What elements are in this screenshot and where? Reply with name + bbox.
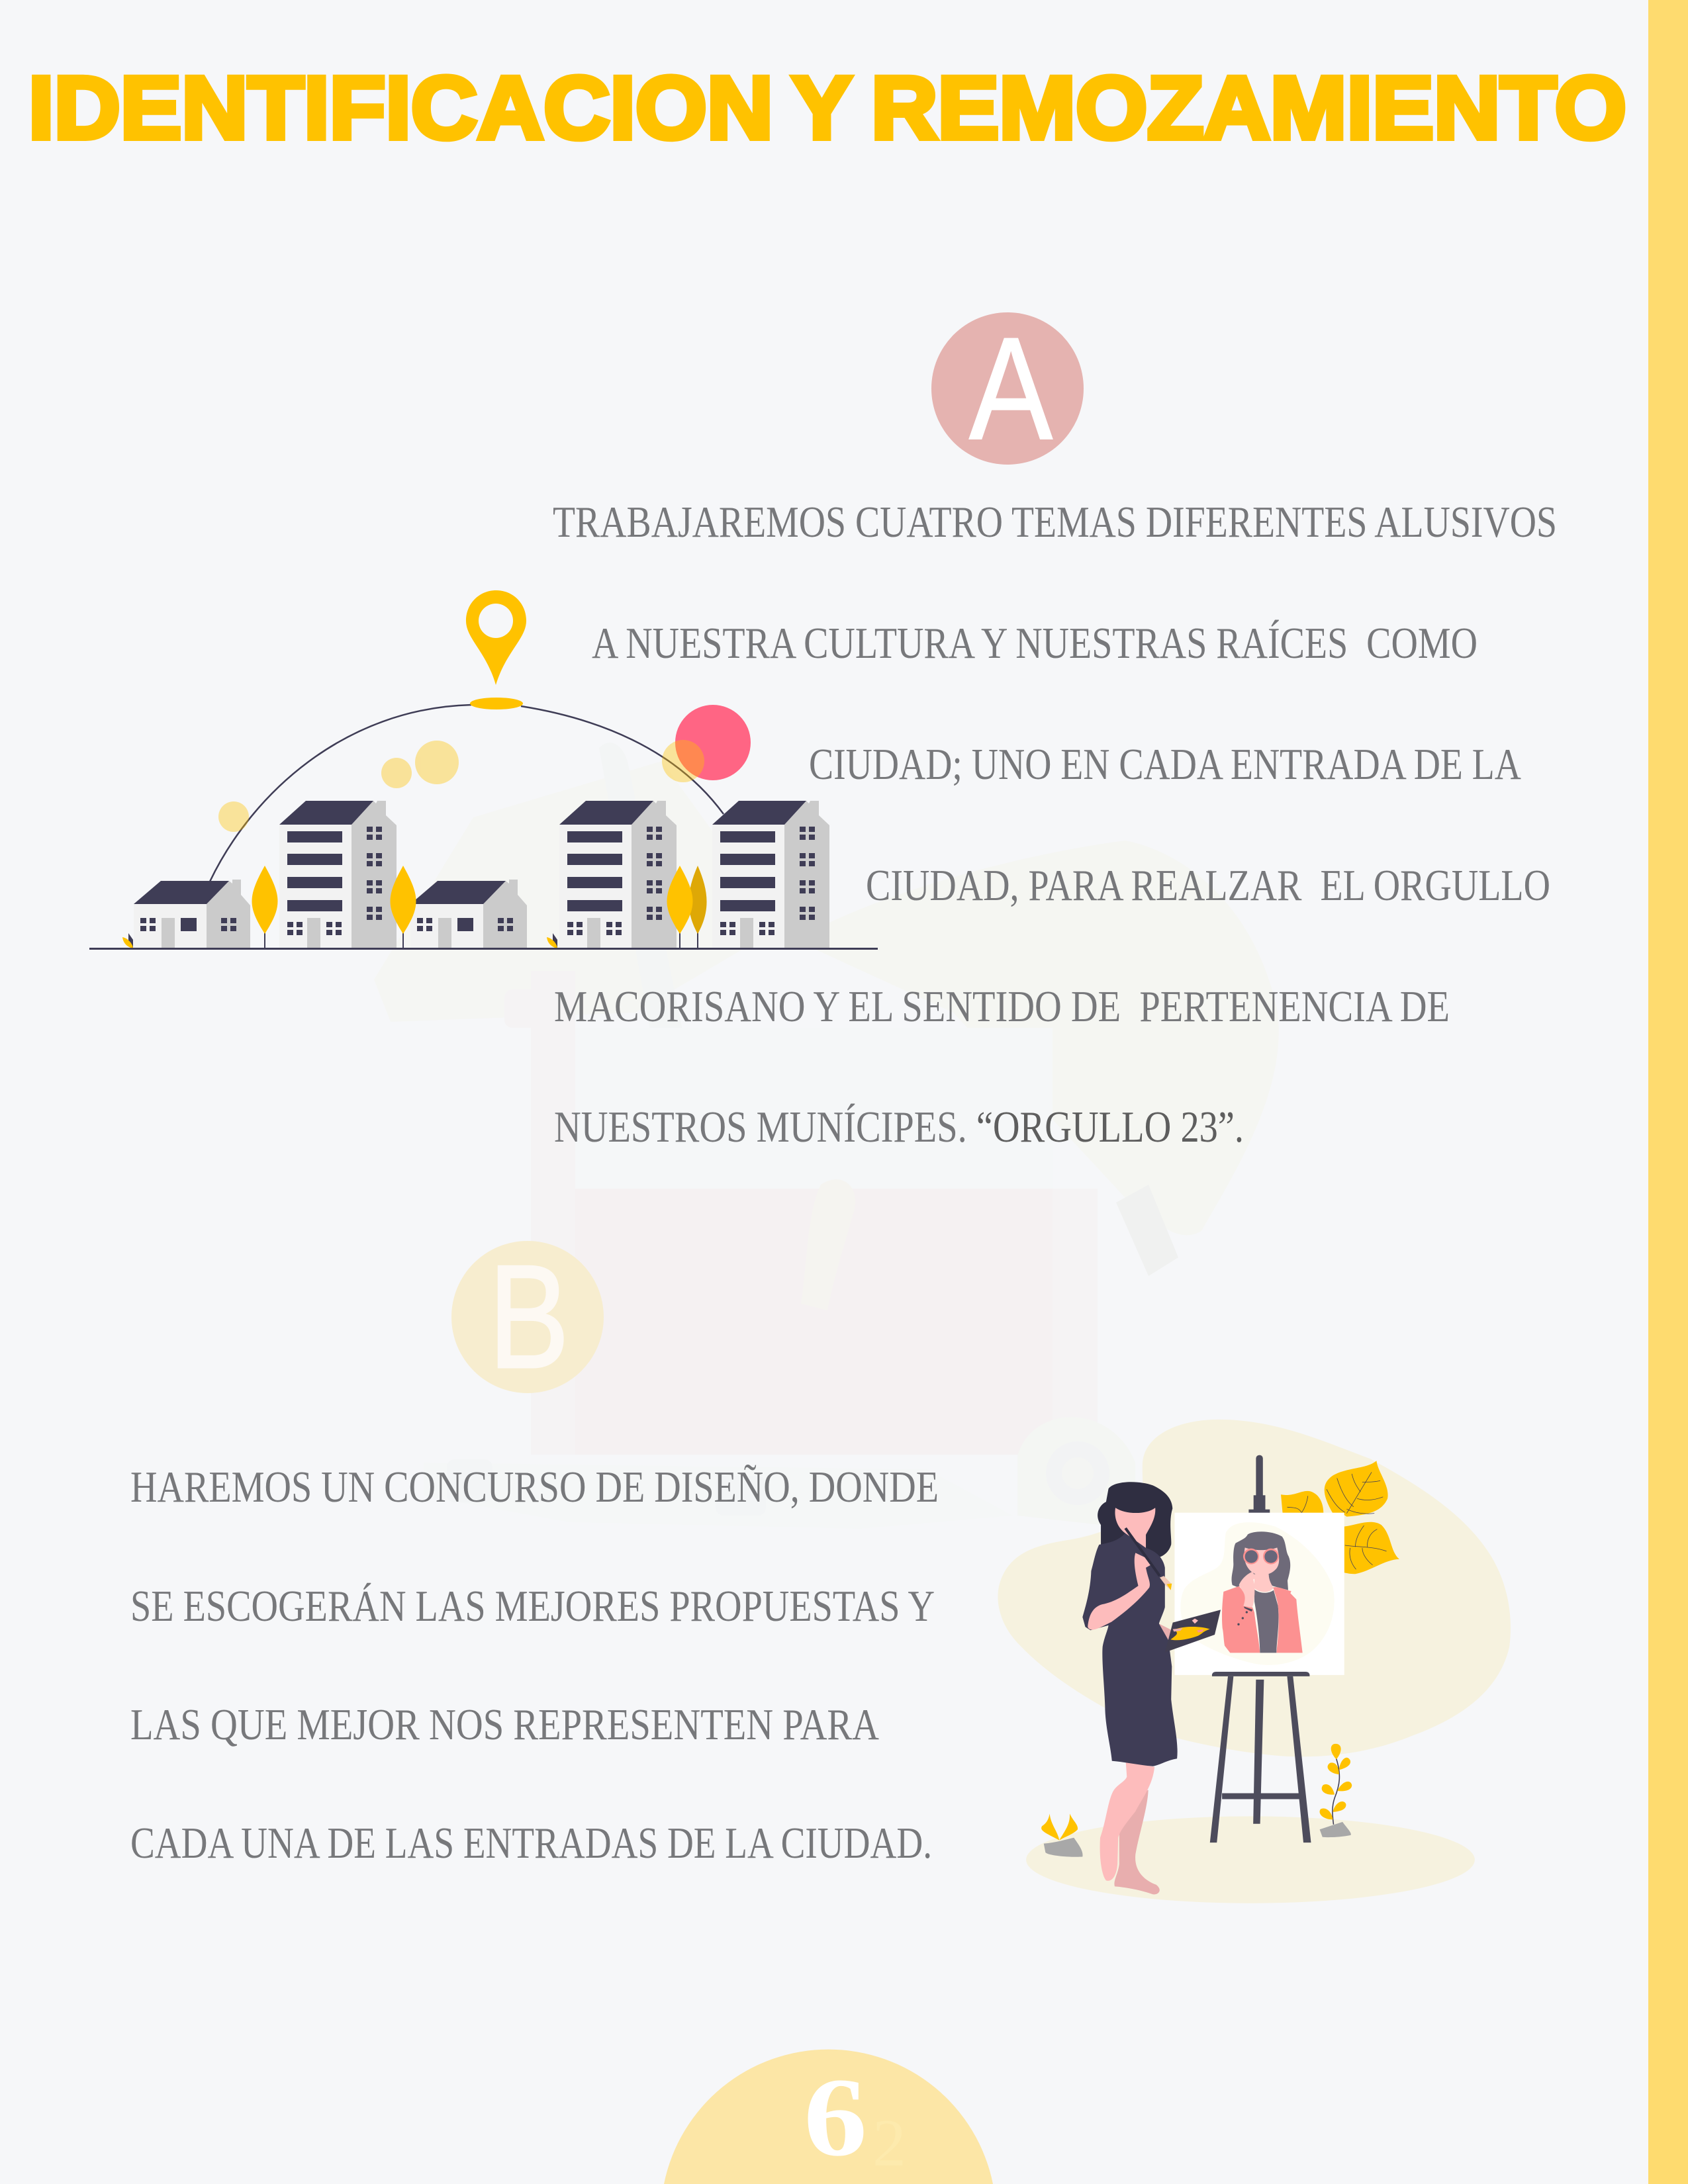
canvas: [1174, 1513, 1344, 1675]
portrait jacket: [1222, 1586, 1303, 1653]
badge B: B: [489, 1235, 569, 1399]
portrait top: [1254, 1590, 1278, 1653]
ground ellipse: [1026, 1816, 1475, 1903]
jacket buttons: [1237, 1606, 1252, 1625]
portrait hand: [1239, 1572, 1256, 1608]
easel legs: [1210, 1672, 1311, 1843]
text block A: CIUDAD; UNO EN CADA ENTRADA DE LA: [809, 740, 1521, 789]
portrait face: [1244, 1547, 1279, 1575]
trees: [252, 866, 707, 948]
text block A: MACORISANO Y EL SENTIDO DE PERTENENCIA DE: [554, 982, 1450, 1031]
location pin: [466, 590, 526, 685]
easel post: [1248, 1455, 1270, 1514]
pin base: [470, 698, 523, 709]
title: REMOZAMIENTO: [871, 59, 1626, 158]
ground line: [89, 948, 878, 950]
portrait hair: [1232, 1531, 1290, 1590]
text block B: [130, 1463, 939, 1868]
title: Y: [792, 59, 852, 158]
page number badge: 6: [804, 2055, 867, 2179]
right plant: [1320, 1744, 1352, 1837]
pink sun: [675, 705, 751, 780]
text block A: NUESTROS MUNÍCIPES. “ORGULLO 23”.: [554, 1103, 1244, 1152]
badge A: A: [969, 307, 1053, 470]
yellow leaves: [1281, 1461, 1399, 1574]
text block B: LAS QUE MEJOR NOS REPRESENTEN PARA: [130, 1700, 879, 1749]
title: [28, 59, 1626, 158]
palette: [1165, 1610, 1221, 1653]
floating yellow circles: [218, 740, 704, 832]
backdrop blob: [998, 1420, 1511, 1756]
page number badge: 2: [872, 2106, 906, 2181]
text block B: SE ESCOGERÁN LAS MEJORES PROPUESTAS Y: [130, 1582, 935, 1631]
buildings: [134, 801, 829, 948]
text block A: CIUDAD, PARA REALZAR EL ORGULLO: [866, 861, 1550, 910]
woman: [1082, 1482, 1178, 1894]
badge A: [931, 307, 1084, 470]
badge B: [451, 1235, 604, 1399]
text block B: HAREMOS UN CONCURSO DE DISEÑO, DONDE: [130, 1463, 939, 1512]
side stripe: [1648, 0, 1688, 2184]
sunglasses: [1243, 1549, 1279, 1565]
portrait backdrop: [1180, 1522, 1335, 1665]
left plant: [1041, 1813, 1083, 1857]
background watermark illustration: [374, 743, 1279, 1529]
sprouts: [122, 933, 557, 948]
arc: [210, 705, 724, 882]
city illustration: [89, 590, 878, 950]
text block A: [553, 498, 1557, 1152]
text block B: CADA UNA DE LAS ENTRADAS DE LA CIUDAD.: [130, 1819, 932, 1868]
portrait neck: [1254, 1574, 1274, 1592]
text block A: A NUESTRA CULTURA Y NUESTRAS RAÍCES COMO: [592, 619, 1477, 668]
portrait on canvas: [1165, 1522, 1335, 1665]
page number badge: [664, 2050, 993, 2184]
artist illustration: [998, 1420, 1511, 1903]
title: IDENTIFICACION: [28, 59, 773, 158]
